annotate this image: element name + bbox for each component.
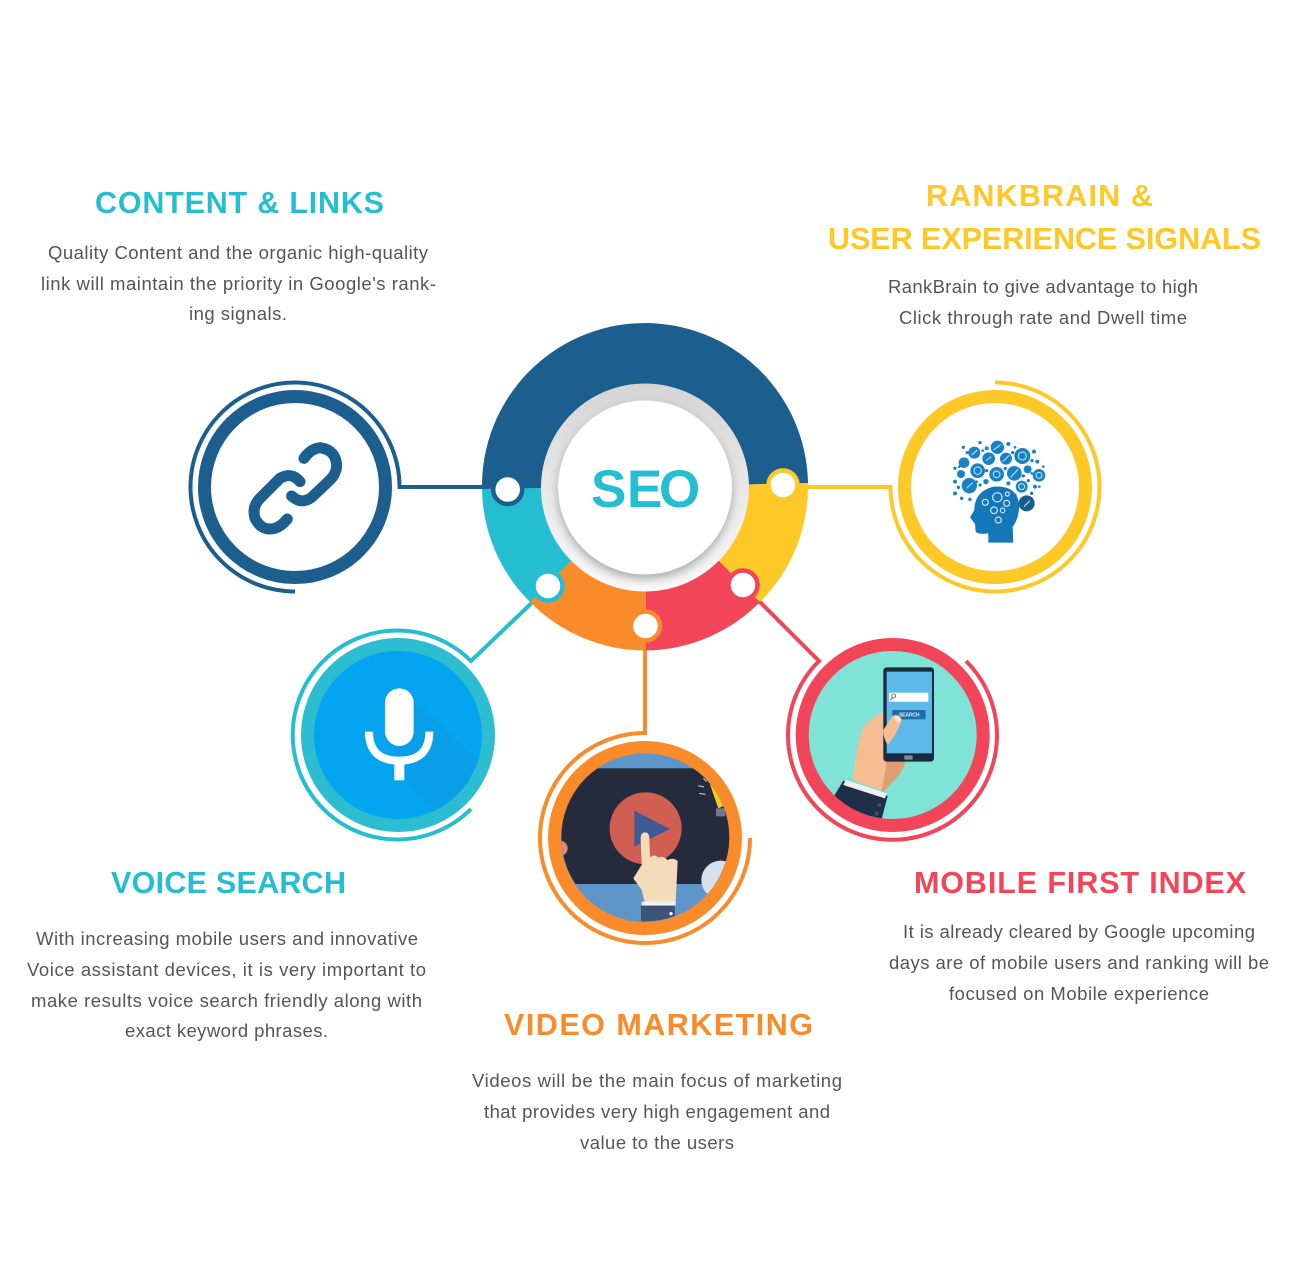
text block: mobile first index description: focused on Mobile experience — [949, 983, 1209, 1004]
segment: yellow — [645, 483, 808, 602]
text block: rankbrain description: RankBrain to give advantage to high — [888, 276, 1198, 297]
label: SEO: SEO — [591, 460, 700, 519]
text block: mobile first index description — [889, 921, 1269, 1004]
icon: chain link — [254, 448, 337, 529]
text block: rankbrain description: Click through rate and Dwell time — [899, 307, 1187, 328]
panel: mobile first icon circle — [802, 644, 983, 826]
segment: blue — [482, 323, 808, 489]
text block: mobile first index description: It is already cleared by Google upcoming — [903, 921, 1255, 942]
panel: voice search text — [27, 866, 426, 1041]
central SEO wheel — [482, 323, 808, 650]
panel: video marketing text — [472, 1008, 842, 1153]
heading: rankbrain and user experience signals: RANKBRAIN & — [926, 179, 1153, 213]
segment: teal — [482, 487, 645, 602]
text block: voice search description: exact keyword phrases. — [125, 1020, 328, 1041]
panel: link icon circle — [204, 396, 386, 578]
segment: orange — [530, 487, 646, 650]
text block: video marketing description: value to the users — [580, 1132, 734, 1153]
heading: mobile first index: MOBILE FIRST INDEX — [914, 866, 1247, 900]
text block: video marketing description: Videos will be the main focus of marketing — [472, 1070, 842, 1091]
heading: voice search: VOICE SEARCH — [111, 866, 346, 900]
text block: mobile first index description: days are of mobile users and ranking will be — [889, 952, 1269, 973]
connector lines and thin outer rings — [190, 382, 1099, 943]
hub: shadowed ring — [541, 384, 749, 592]
text block: content and links description: Quality Content and the organic high-quality — [48, 242, 429, 263]
panel: brain icon circle — [904, 396, 1086, 578]
icon: hand holding phone: SEARCH — [899, 713, 920, 719]
panel: content and links text — [41, 186, 436, 324]
heading: rankbrain and user experience signals — [828, 179, 1261, 256]
panel: rankbrain text — [828, 179, 1261, 328]
icon: microphone — [365, 688, 478, 812]
icon: video player with pointing hand — [561, 753, 730, 922]
segment: red — [645, 487, 760, 650]
icon: brain head with gears — [953, 441, 1045, 543]
text block: content and links description: link will maintain the priority in Google's rank- — [41, 273, 436, 294]
heading: content and links: CONTENT & LINKS — [95, 186, 384, 220]
heading: video marketing: VIDEO MARKETING — [504, 1008, 813, 1042]
text block: voice search description — [27, 928, 426, 1041]
panel: voice search icon circle — [308, 644, 498, 833]
panel: video marketing icon circle — [552, 748, 740, 928]
text block: video marketing description — [472, 1070, 842, 1153]
heading: rankbrain and user experience signals: USER EXPERIENCE SIGNALS — [828, 222, 1261, 256]
node dots — [493, 470, 798, 640]
text block: content and links description — [41, 242, 436, 324]
text block: voice search description: make results voice search friendly along with — [31, 990, 422, 1011]
text block: voice search description: Voice assistant devices, it is very important to — [27, 959, 426, 980]
icon: hand holding phone — [832, 667, 934, 822]
text block: video marketing description: that provides very high engagement and — [484, 1101, 830, 1122]
infographic: SEO factors — [27, 185, 1268, 1149]
panel: mobile first index text — [889, 866, 1269, 1004]
text block: voice search description: With increasing mobile users and innovative — [36, 928, 418, 949]
text block: content and links description: ing signals. — [189, 303, 287, 324]
text block: rankbrain description — [888, 276, 1198, 328]
